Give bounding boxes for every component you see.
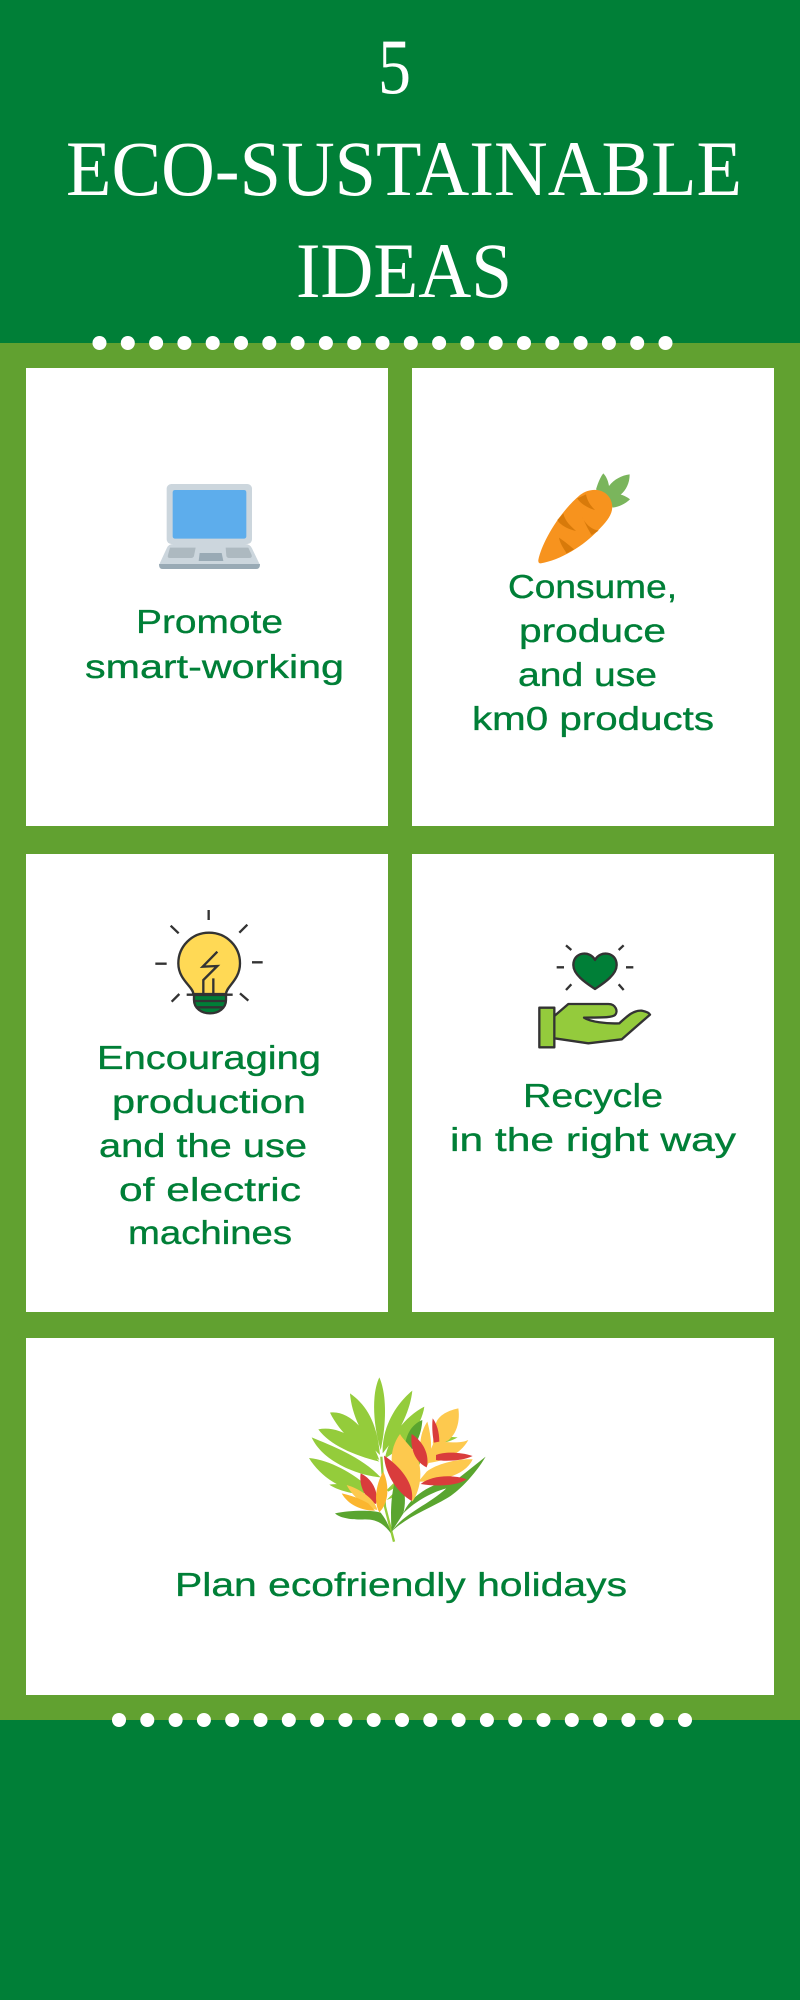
text: km0 products xyxy=(472,568,714,737)
title: IDEAS xyxy=(296,227,512,314)
text: electric machines: Encouraging xyxy=(97,1039,321,1076)
card: electric machines xyxy=(26,854,388,1312)
text: km0 products: produce xyxy=(519,612,666,649)
text: recycle xyxy=(450,1077,737,1158)
card: smart-working xyxy=(26,368,388,826)
text: plan ecofriendly holidays: Plan ecofriendly holidays xyxy=(175,1566,627,1603)
text: km0 products: Consume, xyxy=(508,568,677,605)
text: electric machines: and the use xyxy=(99,1127,307,1164)
icon: carrot xyxy=(538,473,630,563)
card: km0 products xyxy=(412,368,774,826)
text: km0 products: km0 products xyxy=(472,700,714,737)
text: promote smart-working: Promote xyxy=(136,603,283,640)
icon: tropical plant xyxy=(309,1377,486,1542)
title xyxy=(66,23,742,314)
text: electric machines: of electric xyxy=(119,1171,301,1208)
title: 5 xyxy=(378,23,411,110)
footer band xyxy=(0,1720,800,2000)
text: electric machines xyxy=(97,1039,321,1251)
text: electric machines: production xyxy=(112,1083,306,1120)
text: recycle: in the right way xyxy=(450,1121,737,1158)
bottom dotted row xyxy=(112,1713,692,1727)
text: electric machines: machines xyxy=(128,1214,292,1251)
card: recycle xyxy=(412,854,774,1312)
card: ecofriendly holidays xyxy=(26,1338,774,1695)
icon: laptop xyxy=(159,484,260,569)
text: promote smart-working xyxy=(85,603,344,685)
text: recycle: Recycle xyxy=(523,1077,663,1114)
icon: light bulb xyxy=(155,910,263,1013)
title: ECO-SUSTAINABLE xyxy=(66,125,742,212)
light green main panel xyxy=(0,343,800,1720)
text: promote smart-working: smart-working xyxy=(85,648,344,685)
text: km0 products: and use xyxy=(518,656,657,693)
icon: hand holding heart xyxy=(539,945,650,1047)
top dotted row xyxy=(92,336,672,350)
header band xyxy=(0,0,800,343)
